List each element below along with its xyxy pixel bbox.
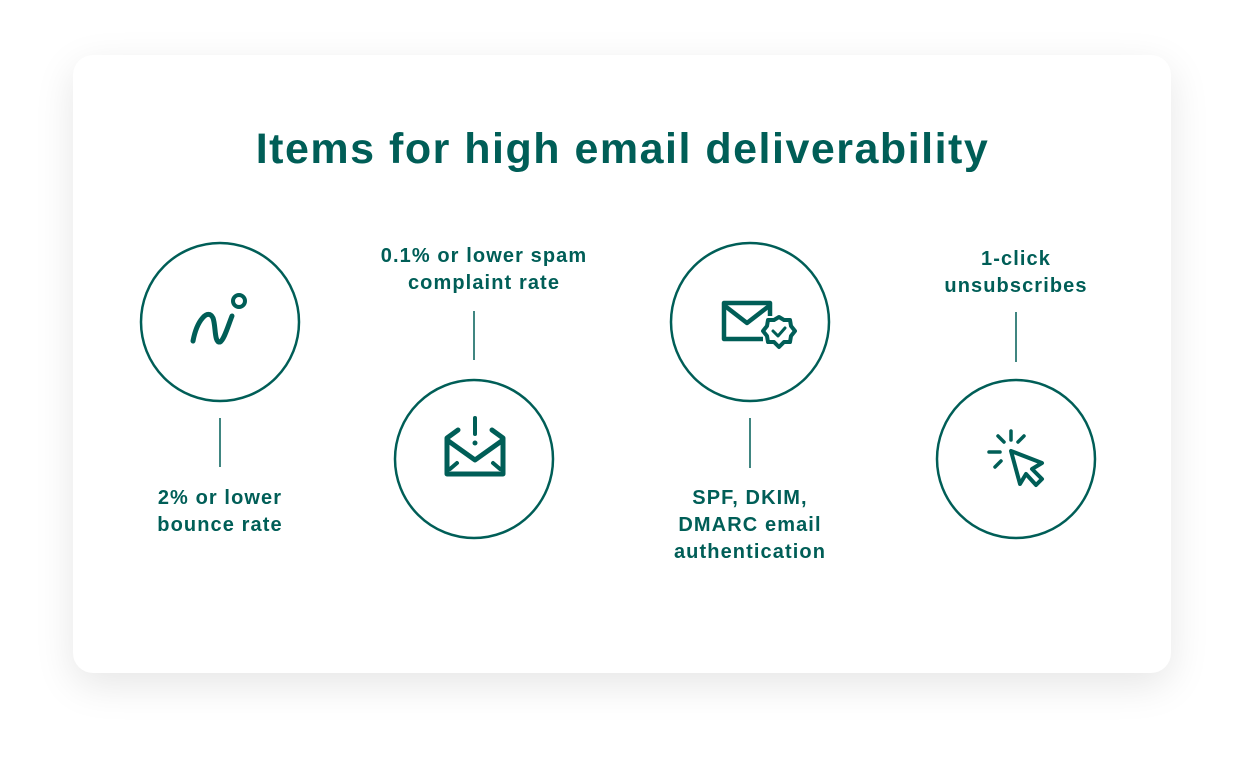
label: unsubscribes: unsubscribes — [944, 275, 1088, 297]
item 2: spam envelope — [395, 311, 553, 538]
label: unsubscribes: 1-click — [981, 248, 1051, 270]
label: spam complaint — [381, 245, 587, 294]
label: spam complaint: 0.1% or lower spam — [381, 245, 587, 267]
label: authentication: authentication — [674, 541, 826, 563]
label: unsubscribes — [944, 248, 1088, 297]
label: spam complaint: complaint rate — [408, 272, 560, 294]
item 4: click cursor — [937, 312, 1095, 538]
label: bounce rate — [157, 487, 283, 536]
item 3: envelope with badge — [671, 243, 829, 468]
label: bounce rate: bounce rate — [157, 514, 283, 536]
item 1: bounce — [141, 243, 299, 467]
card panel — [73, 55, 1171, 673]
label: authentication — [674, 487, 826, 563]
title: Items for high email deliverability — [256, 125, 989, 173]
label: authentication: DMARC email — [678, 514, 822, 536]
label: authentication: SPF, DKIM, — [692, 487, 808, 509]
label: bounce rate: 2% or lower — [158, 487, 282, 509]
